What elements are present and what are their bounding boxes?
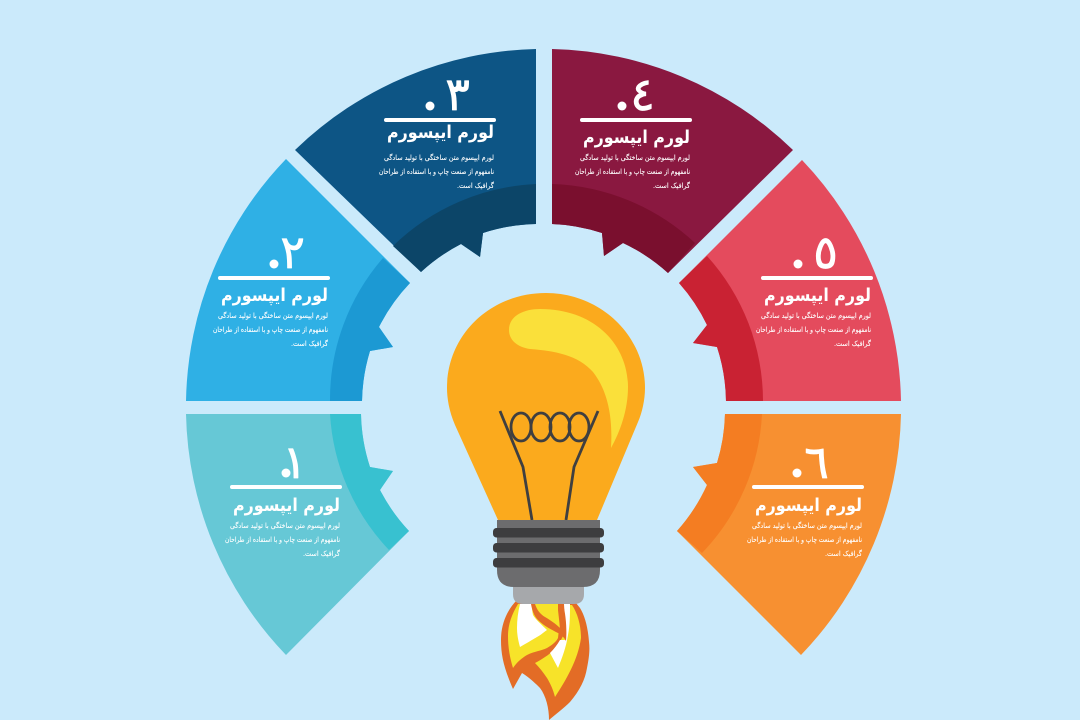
heading 1: لورم ایپسورم: [233, 496, 340, 516]
lower cap: [513, 585, 584, 604]
number 5: [794, 225, 838, 279]
panel: step 5: [679, 160, 901, 401]
text block 2: لورم ایپسوم متن ساختگی با تولید سادگی: [218, 311, 328, 320]
heading 6: لورم ایپسورم: [755, 496, 862, 516]
text block 2: گرافیک است.: [291, 339, 329, 348]
bulb highlight: [509, 309, 628, 448]
text block 1: نامفهوم از صنعت چاپ و با استفاده از طراحان: [225, 535, 340, 544]
bulb glass: [447, 293, 645, 520]
heading 5: لورم ایپسورم: [764, 286, 871, 306]
text block 3: نامفهوم از صنعت چاپ و با استفاده از طراحان: [379, 167, 494, 176]
text block 2: [213, 311, 329, 348]
rocket flame: [501, 598, 589, 720]
text block 4: گرافیک است.: [653, 181, 691, 190]
number 6: [792, 435, 829, 489]
panel: step 3: [295, 49, 536, 272]
text block 4: [575, 153, 691, 190]
number 4: [618, 67, 655, 121]
icon: rocket light bulb: [447, 293, 645, 720]
text block 5: گرافیک است.: [834, 339, 872, 348]
heading 2: لورم ایپسورم: [221, 286, 328, 306]
text block 1: گرافیک است.: [303, 549, 341, 558]
number 3: ٣: [445, 67, 470, 121]
number 2: [270, 225, 305, 279]
heading 3: لورم ایپسورم: [387, 123, 494, 143]
text block 6: لورم ایپسوم متن ساختگی با تولید سادگی: [752, 521, 862, 530]
panel: step 2: [186, 159, 410, 401]
filament: [500, 411, 598, 520]
text block 5: نامفهوم از صنعت چاپ و با استفاده از طراحان: [756, 325, 871, 334]
text block 6: نامفهوم از صنعت چاپ و با استفاده از طراحان: [747, 535, 862, 544]
text block 2: نامفهوم از صنعت چاپ و با استفاده از طراحان: [213, 325, 328, 334]
screw base: [493, 520, 604, 587]
text block 4: لورم ایپسوم متن ساختگی با تولید سادگی: [580, 153, 690, 162]
text block 6: [747, 521, 863, 558]
text block 3: گرافیک است.: [457, 181, 495, 190]
text block 5: لورم ایپسوم متن ساختگی با تولید سادگی: [761, 311, 871, 320]
number 2: ٢: [280, 225, 305, 279]
text block 3: [379, 153, 495, 190]
panel: step 4: [552, 49, 793, 273]
text block 6: گرافیک است.: [825, 549, 863, 558]
number 4: ٤: [630, 67, 655, 121]
number 1: ١: [282, 435, 307, 489]
text block 5: [756, 311, 872, 348]
panel: step 1: [186, 414, 409, 655]
text block 4: نامفهوم از صنعت چاپ و با استفاده از طراحان: [575, 167, 690, 176]
text block 1: [225, 521, 341, 558]
text block 1: لورم ایپسوم متن ساختگی با تولید سادگی: [230, 521, 340, 530]
number 6: ٦: [804, 435, 829, 489]
heading 4: لورم ایپسورم: [583, 128, 690, 148]
number 5: ٥: [813, 225, 838, 279]
number 3: [426, 67, 470, 121]
text block 3: لورم ایپسوم متن ساختگی با تولید سادگی: [384, 153, 494, 162]
panel: step 6: [677, 414, 901, 655]
